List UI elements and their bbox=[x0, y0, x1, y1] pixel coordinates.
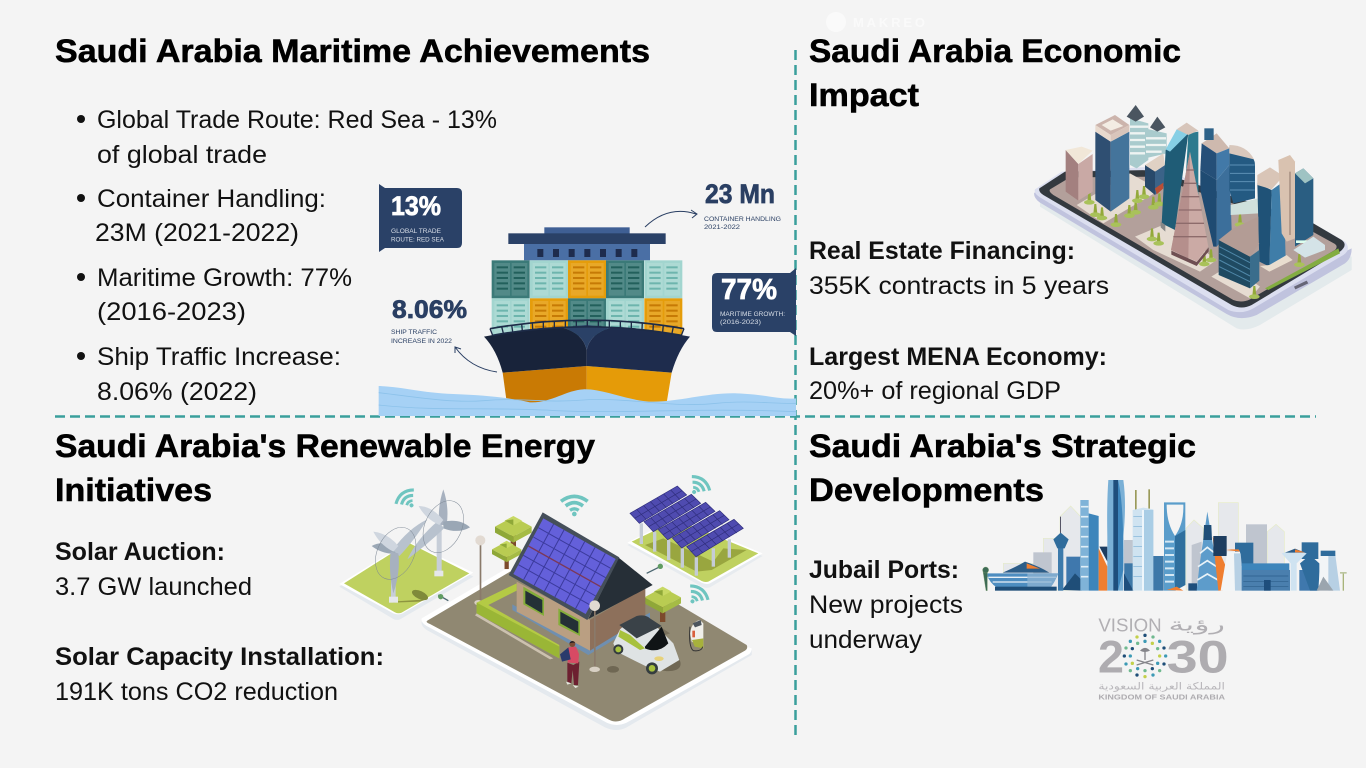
text: jubail ports bbox=[809, 556, 963, 654]
text: largest MENA economy: 20%+ of regional GDP bbox=[809, 377, 1061, 405]
watermark bbox=[826, 12, 925, 32]
callout: 77 percent: 77% bbox=[721, 274, 777, 306]
callout: 77 percent: (2016-2023) bbox=[720, 319, 761, 326]
wind turbine plot bbox=[339, 489, 473, 620]
bullet list: Maritime Growth: 77% bbox=[97, 264, 352, 292]
heading: strategic: Developments bbox=[809, 472, 1044, 508]
text: jubail ports: New projects bbox=[809, 591, 963, 619]
callout: 13 percent: GLOBAL TRADE bbox=[391, 228, 441, 235]
heading: strategic bbox=[809, 428, 1196, 508]
bullet list: 8.06% (2022) bbox=[97, 378, 257, 406]
hedge bbox=[475, 583, 559, 659]
illustration: solar home, wind turbines and solar farm bbox=[339, 473, 763, 730]
heading: economic bbox=[809, 33, 1181, 113]
text: real estate financing bbox=[809, 237, 1109, 300]
callout: 23 Mn: 2021-2022 bbox=[704, 224, 741, 231]
bullet list: Container Handling: bbox=[97, 185, 326, 213]
callout: 77 percent bbox=[712, 268, 796, 336]
arrow: to container handling bbox=[645, 210, 697, 227]
person bbox=[560, 641, 579, 688]
trees bbox=[1084, 186, 1305, 299]
callout: 8.06 percent: SHIP TRAFFIC bbox=[391, 329, 437, 336]
watermark: MAKREO bbox=[853, 15, 925, 30]
lamp bbox=[589, 600, 619, 673]
bullet list: Global Trade Route: Red Sea - 13% bbox=[97, 106, 497, 134]
panel: renewable energy bbox=[55, 428, 763, 730]
text: largest MENA economy: Largest MENA Economy: bbox=[809, 343, 1107, 371]
charging station bbox=[690, 620, 703, 651]
logo: Vision 2030: KINGDOM OF SAUDI ARABIA bbox=[1098, 694, 1225, 701]
heading: renewable: Initiatives bbox=[55, 472, 212, 508]
callout: 8.06 percent: 8.06% bbox=[392, 296, 467, 324]
illustration: Riyadh skyline bbox=[983, 480, 1347, 591]
callout: 8.06 percent: INCREASE IN 2022 bbox=[391, 338, 452, 345]
text: jubail ports: Jubail Ports: bbox=[809, 556, 959, 584]
callout: 13 percent bbox=[379, 184, 462, 252]
heading: economic: Impact bbox=[809, 77, 919, 113]
callout: 23 Mn: 23 Mn bbox=[705, 179, 775, 209]
bullet list: Ship Traffic Increase: bbox=[97, 343, 341, 371]
text: jubail ports: underway bbox=[809, 626, 923, 654]
illustration: city on a phone bbox=[1034, 105, 1352, 329]
heading: renewable bbox=[55, 428, 595, 508]
house bbox=[509, 512, 663, 655]
text: real estate financing: Real Estate Financing: bbox=[809, 237, 1075, 265]
text: solar auction: 3.7 GW launched bbox=[55, 573, 252, 601]
logo: Vision 2030: 2 bbox=[1098, 632, 1124, 683]
text: solar auction bbox=[55, 538, 252, 601]
text: solar capacity bbox=[55, 643, 384, 706]
callout: 23 Mn bbox=[704, 179, 781, 231]
heading: economic: Saudi Arabia Economic bbox=[809, 33, 1181, 69]
callout: 13 percent: ROUTE: RED SEA bbox=[391, 236, 445, 244]
trees and lamps bbox=[474, 516, 681, 622]
logo: Vision 2030: رؤية bbox=[1168, 616, 1225, 636]
bullet list: (2016-2023) bbox=[97, 298, 246, 326]
electric car bbox=[611, 615, 686, 679]
main plot bbox=[422, 568, 752, 730]
panel: maritime achievements bbox=[55, 33, 796, 416]
callout: 13 percent: 13% bbox=[391, 191, 441, 221]
callout: 77 percent: MARITIME GROWTH: bbox=[720, 311, 785, 318]
illustration: container ship bbox=[379, 227, 796, 416]
text: real estate financing: 355K contracts in 5 years bbox=[809, 272, 1109, 300]
heading: maritime: Saudi Arabia Maritime Achievements bbox=[55, 33, 650, 69]
text: solar capacity: 191K tons CO2 reduction bbox=[55, 678, 338, 706]
bullet list bbox=[77, 106, 497, 406]
wifi icons bbox=[393, 473, 712, 610]
logo: Vision 2030: 30 bbox=[1167, 632, 1229, 683]
callout: 23 Mn: CONTAINER HANDLING bbox=[704, 216, 781, 223]
bullet list: 23M (2021-2022) bbox=[95, 219, 299, 247]
bullet list: of global trade bbox=[97, 141, 267, 169]
panel: strategic developments bbox=[809, 428, 1347, 701]
logo: Vision 2030 bbox=[1098, 615, 1229, 701]
text: solar auction: Solar Auction: bbox=[55, 538, 225, 566]
logo: Vision 2030: المملكة العربية السعودية bbox=[1098, 681, 1225, 692]
text: solar capacity: Solar Capacity Installation: bbox=[55, 643, 384, 671]
arrow: to ship traffic bbox=[455, 347, 497, 372]
logo: Vision 2030: VISION bbox=[1098, 615, 1162, 636]
heading: strategic: Saudi Arabia's Strategic bbox=[809, 428, 1196, 464]
panel: economic impact bbox=[809, 33, 1352, 405]
text: largest MENA economy bbox=[809, 343, 1107, 405]
solar farm bbox=[627, 486, 763, 588]
callout: 8.06 percent bbox=[391, 296, 467, 345]
heading: renewable: Saudi Arabia's Renewable Energy bbox=[55, 428, 595, 464]
